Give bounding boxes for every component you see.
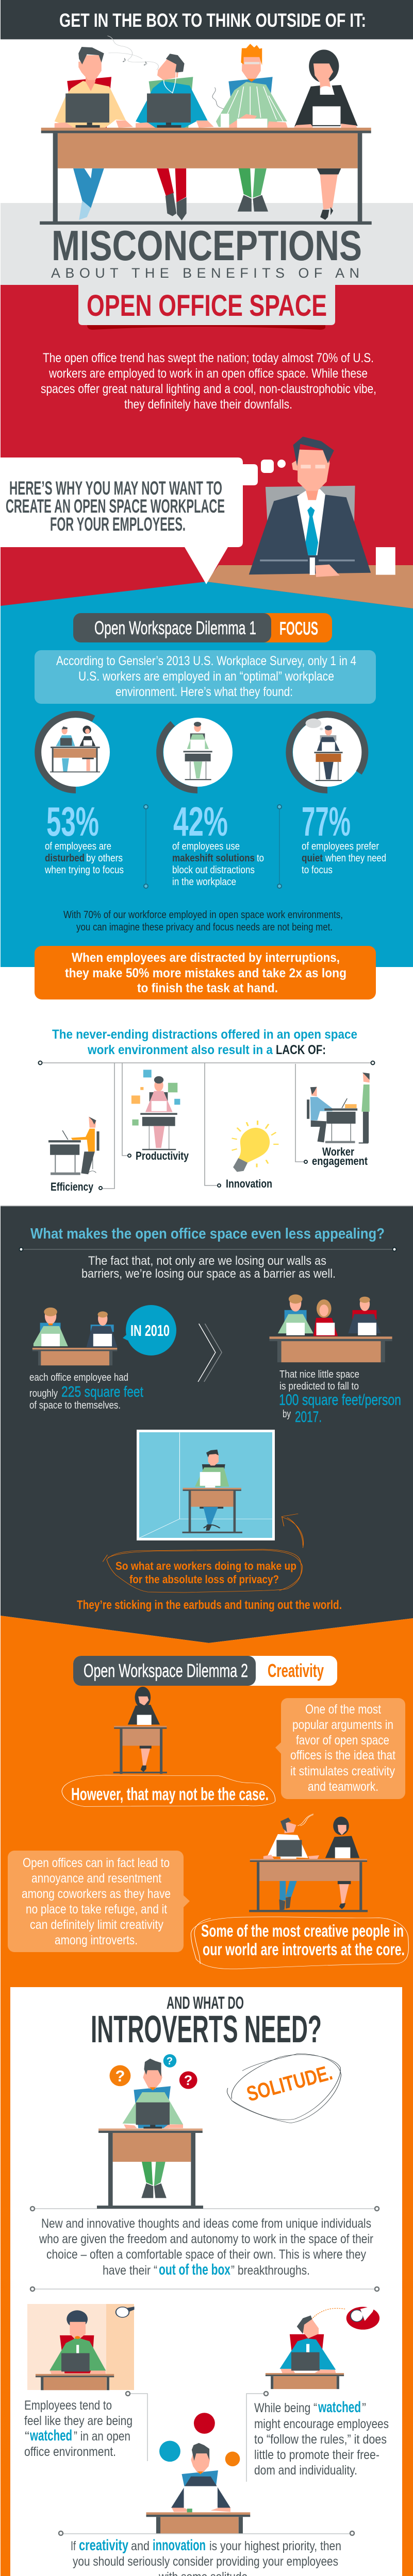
heading: and what do introverts need: [91, 1993, 322, 2050]
callout: annoyance and resentment: among coworkers as they have: [22, 1887, 171, 1901]
innovation lightbulb: [232, 1121, 278, 1172]
stat: 77 percent quiet: [302, 799, 386, 876]
callout: creativity argument: it stimulates creativity: [290, 1764, 395, 1778]
callout: creativity argument: favor of open space: [296, 1733, 389, 1748]
privacy question: for the absolute loss of privacy?: [129, 1573, 279, 1586]
header bar: [1, 0, 413, 40]
stat: 42 percent makeshift: to: [257, 853, 264, 864]
watched right text: watched: [318, 2399, 361, 2416]
callout: annoyance and resentment: annoyance and resentment: [31, 1871, 161, 1886]
desk foot bar: [97, 2206, 203, 2209]
solitude recommendation text: and: [131, 2539, 150, 2553]
pill heading: dilemma 2 creativity: Creativity: [268, 1660, 324, 1681]
stat: 53 percent disturbed: of employees are: [45, 841, 111, 852]
stat: 53 percent disturbed: when trying to focus: [44, 865, 124, 876]
in 2010 bubble: IN 2010: [130, 1321, 170, 1340]
desk: [40, 128, 372, 225]
stat ring 77 percent: [289, 715, 365, 790]
solitude recommendation text: is your highest priority, then: [209, 2539, 341, 2553]
lack-of connector lines: [38, 1061, 374, 1190]
watched right text: might encourage employees: [254, 2417, 389, 2431]
speech bubble: FOR YOUR EMPLOYEES.: [50, 514, 186, 535]
out of the box paragraph: [39, 2216, 373, 2278]
stat: 42 percent makeshift: 42%: [173, 799, 228, 844]
callout: annoyance and resentment: Open offices can in fact lead to: [23, 1856, 170, 1870]
heading: lack of: LACK OF:: [276, 1043, 326, 1057]
100 square feet text: That nice little space: [279, 1369, 359, 1380]
worker engagement figure: [307, 1073, 370, 1144]
ribbon tab: open office space: OPEN OFFICE SPACE: [87, 289, 327, 323]
watched connector lines: [126, 2392, 268, 2482]
pill heading: dilemma 1 focus: Open Workspace Dilemma 1: [94, 617, 256, 638]
survey callout: environment. Here’s what they found:: [115, 685, 293, 699]
losing our space text: The fact that, not only are we losing our walls as: [88, 1254, 326, 1268]
callout: creativity argument: popular arguments in: [292, 1718, 393, 1732]
cubicle with worker: [137, 1430, 275, 1540]
scribble note: creative introverts: [191, 1917, 408, 1969]
stat: 77 percent quiet: quiet: [302, 853, 323, 864]
ribbon tab: open office space: [78, 285, 335, 330]
225 square feet text: each office employee had: [29, 1372, 128, 1383]
worker 2: blue shirt with earbuds: ♪: [143, 59, 148, 67]
watched right text: to “follow the rules,” it does: [254, 2432, 387, 2447]
stat: 53 percent disturbed: by others: [86, 853, 123, 864]
stat: 42 percent makeshift: of employees use: [172, 841, 240, 852]
in 2010 bubble: [123, 1305, 176, 1355]
watched left text: “: [25, 2429, 29, 2444]
lack-of labels: Innovation: [226, 1177, 272, 1190]
watched right text: ”: [362, 2401, 366, 2415]
red intro panel: [1, 285, 413, 615]
earbuds answer: They’re sticking in the earbuds and tuning out the world.: [77, 1598, 342, 1612]
workforce note: you can imagine these privacy and focus needs are not being met.: [76, 922, 333, 933]
puzzled worker at desk with question marks: ?: [115, 2067, 125, 2085]
callout: creativity argument: [275, 1698, 405, 1799]
solitude recommendation text: you should seriously consider providing your employees: [73, 2554, 338, 2569]
100 square feet text: is predicted to fall to: [279, 1381, 359, 1392]
hero illustration: four workers at a desk: [40, 36, 372, 225]
privacy question scribble and arrow: [103, 1514, 303, 1592]
worker 2: blue shirt with earbuds: ♪: [122, 56, 127, 64]
puzzled worker at desk with question marks: ?: [167, 2056, 173, 2067]
efficiency figure: [48, 1116, 100, 1175]
worker 2: blue shirt with earbuds: [107, 36, 214, 128]
watched left text: ” in an open: [74, 2429, 130, 2444]
woman at desk: [113, 1687, 167, 1774]
out of the box paragraph: ” breakthroughs.: [231, 2263, 310, 2278]
worker 1: yellow shirt: [55, 47, 133, 128]
callout: annoyance and resentment: no place to take refuge, and it: [26, 1902, 167, 1917]
pill heading: dilemma 2 creativity: [73, 1656, 337, 1686]
stat: 53 percent disturbed: [44, 799, 124, 876]
watched left text: feel like they are being: [24, 2414, 133, 2428]
scribble note: however: [62, 1775, 275, 1806]
survey callout: According to Gensler’s 2013 U.S. Workplace Survey, only 1 in 4: [56, 654, 356, 668]
stat: 77 percent quiet: of employees prefer: [302, 841, 379, 852]
heading: lack of: The never-ending distractions offered in an open space: [52, 1027, 357, 1042]
orange callout: distractions: they make 50% more mistakes and take 2x as long: [65, 966, 346, 980]
stat: 42 percent makeshift: makeshift solutions: [172, 853, 255, 864]
intro paragraph: [41, 351, 376, 412]
watched right text: little to promote their free-: [254, 2448, 379, 2462]
watched right text: dom and individuality.: [254, 2463, 357, 2478]
stat ring 42 percent: [160, 718, 233, 790]
worker with colored thought bubbles: [146, 2413, 250, 2533]
stat ring 53 percent: [38, 715, 110, 790]
watched left text: Employees tend to: [24, 2398, 112, 2413]
stat: 77 percent quiet: when they need: [325, 853, 386, 864]
dark section top rule: [1, 1206, 413, 1207]
lack-of labels: engagement: [312, 1155, 368, 1167]
100 square feet text: 2017.: [295, 1409, 322, 1426]
orange callout: distractions: to finish the task at hand.: [137, 981, 278, 995]
watched right text: [254, 2399, 389, 2478]
solitude recommendation text: innovation: [153, 2537, 206, 2554]
out of the box paragraph: have their “: [103, 2263, 157, 2278]
lack-of labels: Worker: [322, 1145, 354, 1158]
pill heading: dilemma 1 focus: [73, 613, 332, 642]
stat dividers: [144, 805, 282, 888]
solitude recommendation text: [71, 2537, 341, 2576]
callout: annoyance and resentment: among introverts.: [55, 1933, 138, 1947]
stat: 42 percent makeshift: [172, 799, 264, 888]
blue focus section background: [1, 582, 413, 967]
privacy question: So what are workers doing to make up: [115, 1560, 296, 1572]
watched left text: [24, 2398, 133, 2459]
100 square feet text: by: [283, 1409, 291, 1420]
speech bubble: [1, 457, 286, 584]
stat: 53 percent disturbed: disturbed: [45, 853, 85, 864]
orange section background: [1, 1616, 413, 2576]
pill heading: dilemma 2 creativity: Open Workspace Dilemma 2: [84, 1660, 248, 1681]
lack-of labels: Efficiency: [51, 1180, 94, 1193]
solitude recommendation text: creativity: [79, 2537, 128, 2554]
losing our space text: [81, 1254, 336, 1281]
225 square feet text: of space to themselves.: [29, 1400, 121, 1411]
solitude recommendation text: If: [71, 2539, 76, 2553]
intro paragraph: they definitely have their downfalls.: [124, 397, 292, 412]
callout: creativity argument: offices is the idea that: [290, 1748, 395, 1762]
stat: 42 percent makeshift: in the workplace: [172, 876, 236, 888]
white introverts panel: [10, 1987, 402, 2576]
survey callout: U.S. workers are employed in an “optimal” workplace: [78, 669, 334, 684]
double chevron arrow: [198, 1324, 222, 1382]
watched right text: While being “: [254, 2401, 317, 2415]
stat: 77 percent quiet: to focus: [302, 865, 333, 876]
speech bubble: CREATE AN OPEN SPACE WORKPLACE: [6, 496, 225, 517]
divider with knobs: [20, 1248, 396, 1251]
privacy question: [115, 1560, 296, 1586]
callout: annoyance and resentment: can definitely limit creativity: [30, 1918, 163, 1932]
heading: and what do introverts need: AND WHAT DO: [167, 1993, 244, 2013]
pill heading: dilemma 1 focus: FOCUS: [279, 618, 318, 639]
paragraph rules: [30, 2207, 379, 2291]
puzzled worker at desk with question marks: ?: [184, 2073, 192, 2088]
225 square feet text: [29, 1372, 143, 1411]
worker legs: [73, 167, 341, 221]
puzzled worker at desk with question marks: [98, 2054, 203, 2207]
225 square feet text: roughly: [29, 1388, 58, 1399]
two coworkers at desk: [249, 1814, 368, 1912]
callout: creativity argument: and teamwork.: [308, 1780, 378, 1794]
worker 4: woman in black dress: [294, 49, 358, 128]
solitude recommendation rules: [59, 2531, 354, 2576]
solitude scribble stamp: [227, 2054, 341, 2123]
stat: 42 percent makeshift: block out distractions: [172, 865, 255, 876]
heading: lack of: [52, 1027, 357, 1057]
survey callout: [35, 650, 376, 704]
orange callout: distractions: When employees are distracted by interruptions,: [72, 951, 340, 965]
stat: 77 percent quiet: 77%: [302, 799, 351, 844]
callout: creativity argument: One of the most: [305, 1702, 381, 1717]
lack-of labels: [51, 1145, 368, 1193]
speech bubble: HERE’S WHY YOU MAY NOT WANT TO: [9, 478, 222, 499]
worker 3: striped shirt and orange hair: [212, 44, 288, 128]
subtitle: about the benefits of an: ABOUT THE BENEFITS OF AN: [51, 265, 359, 281]
workforce note: [63, 909, 343, 933]
225 square feet text: 225 square feet: [61, 1384, 143, 1400]
watched left text: office environment.: [24, 2445, 116, 2459]
out of the box paragraph: out of the box: [159, 2261, 230, 2278]
losing our space text: barriers, we’re losing our space as a barrier as well.: [81, 1267, 336, 1281]
lack-of labels: Productivity: [136, 1149, 189, 1162]
boss figure: [249, 436, 395, 577]
orange callout: distractions: [35, 946, 376, 999]
2010 desk with two workers: [32, 1308, 117, 1365]
dark section background: [1, 1206, 413, 1643]
desk surface behind boss: [206, 565, 413, 608]
watched left text: watched: [29, 2427, 72, 2444]
callout: annoyance and resentment: [8, 1851, 190, 1952]
future desk with three workers: [270, 1294, 392, 1362]
floor band: [1, 203, 413, 285]
stat: 53 percent disturbed: 53%: [46, 799, 99, 844]
heading: lack of: work environment also result in a: [87, 1043, 273, 1057]
solitude scribble stamp: SOLITUDE.: [244, 2060, 335, 2106]
productivity figure: [131, 1070, 180, 1150]
watched employee in office corner: [27, 2304, 135, 2390]
100 square feet text: [279, 1369, 401, 1426]
worker looking at security camera: [266, 2306, 379, 2389]
scribble note: however: However, that may not be the case.: [71, 1785, 269, 1804]
workforce note: With 70% of our workforce employed in open space work environments,: [63, 909, 343, 921]
